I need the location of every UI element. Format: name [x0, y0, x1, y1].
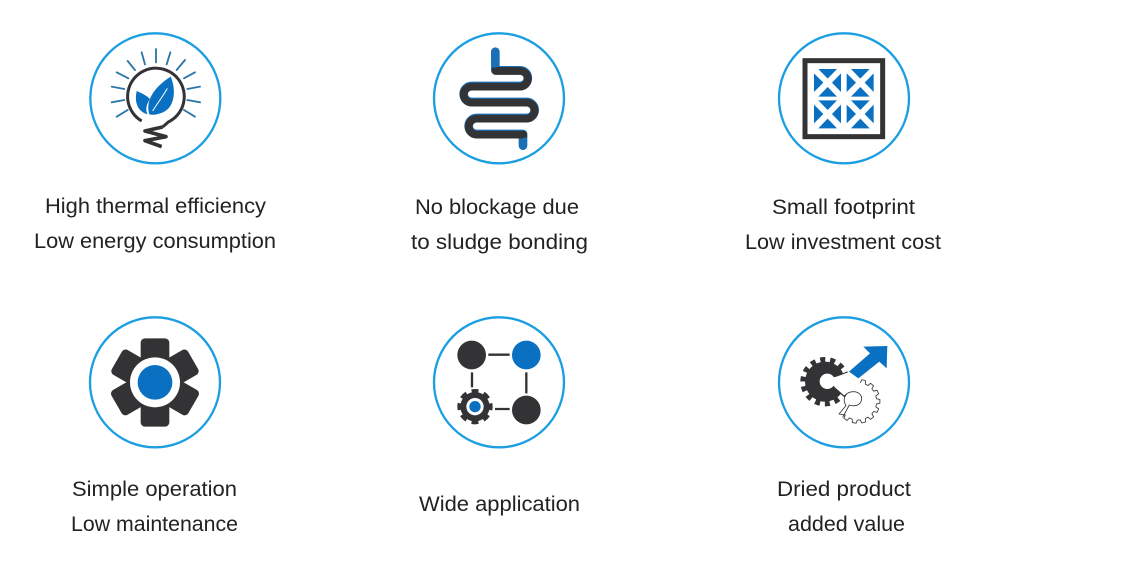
panel: high thermal efficiency — [34, 33, 276, 253]
icon: serpentine tube — [434, 33, 564, 163]
label: high thermal efficiency: Low energy consumption — [34, 230, 276, 253]
label: small footprint: Low investment cost — [745, 231, 941, 254]
label: dried product value — [777, 478, 911, 536]
label: small footprint — [745, 196, 941, 254]
panel: small footprint — [745, 33, 941, 254]
label: high thermal efficiency: High thermal efficiency — [45, 195, 267, 218]
label: simple operation: Low maintenance — [71, 513, 238, 536]
label: no blockage: to sludge bonding — [411, 231, 588, 254]
label: high thermal efficiency — [34, 195, 276, 253]
icon: connected nodes — [434, 317, 564, 447]
icon: six-arm gear — [90, 317, 220, 447]
label: wide application: Wide application — [419, 493, 580, 516]
label: dried product value: added value — [788, 513, 905, 536]
panel: wide application — [419, 317, 580, 516]
label: small footprint: Small footprint — [772, 196, 915, 219]
label: no blockage — [411, 196, 588, 254]
label: no blockage: No blockage due — [415, 196, 579, 219]
panel: dried product value — [777, 317, 911, 536]
icon: gears with rising arrow — [779, 317, 909, 447]
panel: simple operation — [71, 317, 238, 536]
label: dried product value: Dried product — [777, 478, 911, 501]
icon: light bulb with leaves — [90, 33, 220, 163]
panel: no blockage — [411, 33, 588, 254]
label: simple operation: Simple operation — [72, 478, 237, 501]
icon: compact heat exchanger grid — [779, 33, 909, 163]
label: simple operation — [71, 478, 238, 536]
